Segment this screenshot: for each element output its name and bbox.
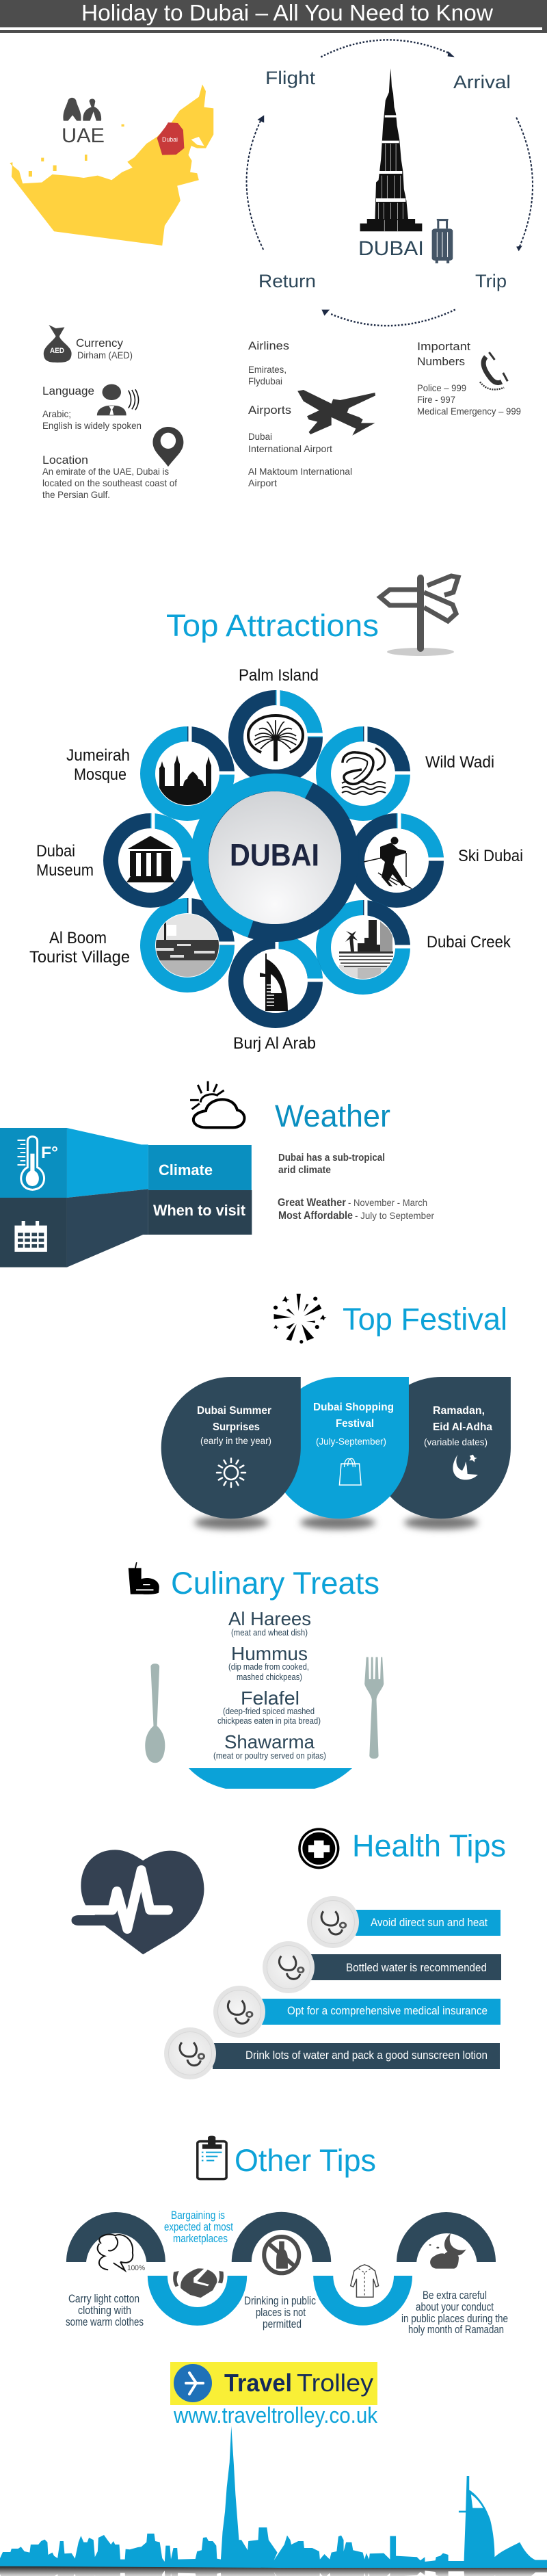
panel: culinary treats	[129, 1562, 384, 1789]
label: Dubai Museum: Museum	[36, 861, 94, 880]
tip bar: bottled water: Bottled water is recommended	[346, 1961, 487, 1974]
label: Burj Al Arab: Burj Al Arab	[233, 1034, 316, 1053]
text: clothing tip: some warm clothes	[66, 2315, 144, 2328]
icon: stethoscope badge 2	[263, 1941, 315, 1993]
icon: palm	[248, 715, 303, 761]
icon: village photo	[155, 913, 219, 978]
label: Dubai Museum: Dubai	[36, 842, 75, 860]
travel cycle	[247, 40, 533, 326]
center circle: Dubai: DUBAI	[230, 837, 319, 873]
link: website: www.traveltrolley.co.uk	[173, 2403, 378, 2428]
text: Felafel: (deep-fried spiced mashed	[223, 1706, 315, 1716]
arrow: trip to return	[321, 310, 455, 326]
tip bar: insurance	[262, 1999, 501, 2025]
drop: Dubai Summer Surprises	[161, 1377, 301, 1519]
label: Al Boom Tourist Village	[29, 929, 130, 967]
text: Felafel	[217, 1687, 321, 1726]
text: numbers: Fire - 997	[417, 394, 455, 405]
ring: Dubai Museum	[111, 812, 199, 900]
icon: no alcohol	[264, 2237, 299, 2273]
text: location: Location	[42, 454, 88, 466]
icon: museum	[126, 836, 175, 882]
ring: Al Boom Tourist Village	[148, 897, 236, 985]
icon: fork	[364, 1657, 384, 1759]
text: airlines: Emirates,	[248, 364, 286, 375]
tip bar: bottled water	[310, 1954, 501, 1980]
text: location: An emirate of the UAE, Dubai is	[42, 466, 169, 477]
text: clothing tip: clothing with	[78, 2304, 131, 2317]
panel: important numbers	[417, 340, 521, 417]
text: numbers	[417, 340, 521, 417]
text: language: English is widely spoken	[42, 420, 142, 431]
shadows under drops	[194, 1516, 478, 1529]
heading: culinary treats: Culinary Treats	[171, 1566, 379, 1601]
text: Hummus	[228, 1643, 309, 1682]
text: visit seasons: - July to September	[355, 1210, 434, 1221]
text: bargaining tip: Bargaining is	[171, 2209, 225, 2222]
text: language: Arabic;	[42, 408, 71, 419]
icon: sun and cloud	[190, 1081, 244, 1127]
text: numbers: Police – 999	[417, 382, 466, 393]
icon: cotton	[98, 2235, 133, 2270]
text: airports: Airport	[248, 477, 277, 488]
text: AED on bag: AED	[50, 347, 64, 355]
text: climate description: Dubai has a sub-tropical	[278, 1152, 385, 1164]
label: when to visit: When to visit	[153, 1202, 246, 1219]
icon: signpost	[380, 576, 458, 656]
icon: water slide	[342, 748, 386, 794]
text: visit seasons	[278, 1197, 434, 1222]
text: 100 percent: 100%	[127, 2264, 145, 2272]
tip bar: sun and heat	[356, 1910, 501, 1936]
text: conduct tip: Be extra careful	[423, 2289, 487, 2302]
map of the UAE: Dubai	[162, 136, 178, 144]
heading: health tips: Health Tips	[352, 1828, 506, 1863]
drop: Dubai Shopping Festival	[269, 1377, 409, 1519]
arrow: return to flight	[247, 115, 264, 250]
text: Hummus: mashed chickpeas)	[237, 1672, 302, 1682]
title banner	[0, 0, 547, 33]
text: airports: Airports	[248, 404, 291, 417]
drop: Ramadan, Eid Al-Adha	[371, 1377, 511, 1519]
panel: weather	[0, 1081, 434, 1267]
icon: medical cross	[298, 1828, 339, 1869]
label: Jumeirah Mosque	[66, 746, 130, 784]
text: airports: Al Maktoum International	[248, 466, 352, 477]
map of the UAE: UAE	[62, 124, 105, 147]
text: currency: Dirham (AED)	[77, 350, 133, 360]
icon: crescent and mosque	[453, 1455, 478, 1480]
panel: key facts left	[42, 325, 183, 500]
label: Palm Island: Palm Island	[239, 666, 319, 685]
label: Dubai: DUBAI	[358, 237, 424, 260]
panel: top festival	[161, 1294, 511, 1529]
ribbon: when to visit	[0, 1189, 252, 1267]
text: drinking tip: places is not	[256, 2306, 306, 2319]
icon: thermometer	[18, 1137, 44, 1190]
text: Shawarma	[213, 1731, 326, 1761]
map of the UAE	[10, 84, 213, 246]
text: Hummus: (dip made from cooked,	[228, 1661, 309, 1672]
label: Al Boom Tourist Village: Al Boom	[49, 929, 107, 947]
drop: Dubai Shopping Festival: Dubai Shopping	[313, 1402, 394, 1413]
heading: top festival: Top Festival	[343, 1302, 507, 1337]
arrow: arrival to trip	[516, 118, 533, 251]
icon: clipboard	[198, 2135, 226, 2179]
drop: Dubai Summer Surprises: Surprises	[213, 1421, 260, 1433]
label: arrival: Arrival	[453, 72, 511, 92]
icon: Burj Al Arab hotel	[260, 954, 288, 1011]
heading: other tips: Other Tips	[235, 2143, 376, 2178]
center circle: Dubai	[199, 783, 350, 933]
heading: weather: Weather	[275, 1099, 390, 1133]
label: Ski Dubai: Ski Dubai	[458, 847, 523, 865]
icon: speaker	[97, 384, 139, 415]
text: numbers: Numbers	[417, 355, 465, 368]
tip bar: water and sunscreen: Drink lots of water and pack a good sunscreen lotion	[245, 2049, 488, 2062]
text: conduct tip: holy month of Ramadan	[408, 2323, 504, 2336]
heading: top attractions: Top Attractions	[166, 608, 379, 643]
text: currency	[76, 337, 133, 360]
icon: creek skyline	[339, 920, 393, 979]
text: Shawarma: (meat or poultry served on pitas)	[213, 1750, 326, 1761]
icon: spoon	[145, 1664, 165, 1763]
ring: Ski Dubai	[357, 812, 445, 900]
text: conduct tip	[401, 2289, 508, 2336]
label: Jumeirah Mosque: Jumeirah	[66, 746, 130, 765]
text: currency: Currency	[76, 337, 123, 350]
icon: fireworks	[274, 1294, 327, 1343]
skyline reflection	[0, 2566, 547, 2576]
label: return: Return	[258, 271, 316, 291]
text: bargaining tip: expected at most	[164, 2220, 233, 2233]
label: trip: Trip	[475, 271, 507, 291]
text: clothing tip: Carry light cotton	[68, 2292, 139, 2305]
text: F degrees: F°	[41, 1144, 58, 1162]
text: Al Harees: (meat and wheat dish)	[231, 1627, 308, 1638]
icon: Burj Khalifa	[360, 68, 422, 231]
label: Jumeirah Mosque: Mosque	[74, 765, 126, 784]
label: Al Boom Tourist Village: Tourist Village	[29, 948, 130, 967]
drop: Dubai Summer Surprises: Dubai Summer	[197, 1405, 271, 1417]
text: airports: Dubai	[248, 431, 272, 442]
drop: Dubai Shopping Festival: Festival	[336, 1418, 374, 1430]
ring: Dubai Creek	[323, 899, 412, 987]
icon: plate	[189, 1768, 352, 1789]
drop: Dubai Summer Surprises: (early in the year)	[200, 1435, 271, 1446]
ring: Palm Island	[236, 689, 324, 777]
heading: top attractions	[166, 576, 458, 656]
icon: money bag	[44, 325, 72, 363]
text: airports	[248, 404, 352, 488]
title banner: Holiday to Dubai – All You Need to Know	[81, 0, 493, 25]
label: Dubai Creek: Dubai Creek	[427, 933, 511, 951]
icon: calendar	[14, 1221, 47, 1252]
skyline	[0, 2426, 547, 2576]
panel: health tips	[72, 1828, 506, 2079]
logo: Travel Trolley	[170, 2362, 377, 2405]
drop: Ramadan, Eid Al-Adha: Eid Al-Adha	[433, 1421, 492, 1433]
drop: Dubai Shopping Festival: (July-September)	[316, 1436, 386, 1447]
tip bar: sun and heat: Avoid direct sun and heat	[371, 1916, 488, 1929]
text: airlines	[248, 339, 289, 386]
label: climate: Climate	[159, 1161, 213, 1179]
icon: handshake	[173, 2268, 224, 2298]
label: flight: Flight	[265, 68, 316, 88]
ribbon: climate	[0, 1128, 252, 1198]
icon: stethoscope badge 4	[164, 2027, 216, 2079]
text: location: located on the southeast coast of	[42, 477, 177, 488]
logo: Travel Trolley: Travel	[224, 2369, 292, 2397]
text: language	[42, 384, 142, 431]
icon: telephone	[480, 352, 507, 389]
icon: shopping bag	[339, 1458, 361, 1485]
icon: moon and cloud	[429, 2233, 466, 2269]
text: Felafel: Felafel	[241, 1687, 299, 1709]
text: climate description: arid climate	[278, 1164, 331, 1176]
text: location	[42, 454, 177, 500]
text: visit seasons: - November - March	[348, 1197, 427, 1208]
ring: Jumeirah Mosque	[148, 725, 236, 813]
skyline silhouette	[0, 2426, 547, 2568]
icon: stethoscope badge 1	[307, 1896, 359, 1948]
arcs: serpentine path	[66, 2212, 496, 2326]
icon: airplane	[297, 390, 375, 436]
drop: Ramadan, Eid Al-Adha: Ramadan,	[433, 1405, 485, 1417]
icon: location pin	[152, 427, 183, 466]
icon: suitcase	[432, 219, 453, 263]
ring: Wild Wadi	[323, 725, 412, 813]
panel: airlines and airports	[248, 339, 375, 488]
label: Wild Wadi: Wild Wadi	[425, 753, 494, 772]
chart: attractions wheel	[29, 666, 523, 1053]
text: bargaining tip	[164, 2209, 233, 2245]
text: Hummus: Hummus	[231, 1643, 308, 1664]
icon: sun	[217, 1458, 245, 1487]
icon: stethoscope badge 3	[213, 1986, 265, 2038]
panel: other tips	[66, 2135, 508, 2336]
ring: Burj Al Arab	[236, 932, 324, 1021]
text: conduct tip: in public places during the	[401, 2312, 508, 2325]
text: airports: International Airport	[248, 443, 332, 454]
text: numbers: Medical Emergency – 999	[417, 406, 521, 417]
text: drinking tip: permitted	[263, 2317, 302, 2330]
icon: drink and burger	[129, 1562, 159, 1594]
text: clothing tip	[66, 2292, 144, 2328]
text: conduct tip: about your conduct	[416, 2300, 494, 2313]
text: visit seasons: Great Weather	[278, 1197, 346, 1209]
text: airlines: Airlines	[248, 339, 289, 352]
text: airlines: Flydubai	[248, 376, 282, 386]
text: climate description	[278, 1152, 385, 1176]
tip bar: water and sunscreen	[213, 2043, 500, 2069]
text: bargaining tip: marketplaces	[173, 2232, 228, 2245]
icon: shirt	[351, 2265, 379, 2297]
text: language: Language	[42, 384, 94, 397]
text: visit seasons: Most Affordable	[278, 1210, 353, 1222]
text: drinking tip: Drinking in public	[244, 2294, 316, 2307]
label: Dubai Museum	[36, 842, 94, 880]
logo: Travel Trolley: Trolley	[297, 2369, 373, 2397]
arrow: flight to arrival	[321, 40, 455, 57]
icon: skier	[364, 837, 412, 889]
text: location: the Persian Gulf.	[42, 489, 110, 500]
icon: heart with pulse	[72, 1850, 204, 1954]
text: drinking tip	[244, 2294, 316, 2330]
text: Felafel: chickpeas eaten in pita bread)	[217, 1716, 321, 1726]
text: Al Harees: Al Harees	[228, 1608, 311, 1629]
text: Shawarma: Shawarma	[224, 1731, 315, 1752]
icon: couple	[63, 98, 101, 121]
drop: Ramadan, Eid Al-Adha: (variable dates)	[424, 1436, 488, 1447]
tip bar: insurance: Opt for a comprehensive medical insurance	[287, 2004, 488, 2017]
icon: mosque	[159, 755, 211, 806]
text: numbers: Important	[417, 340, 470, 353]
